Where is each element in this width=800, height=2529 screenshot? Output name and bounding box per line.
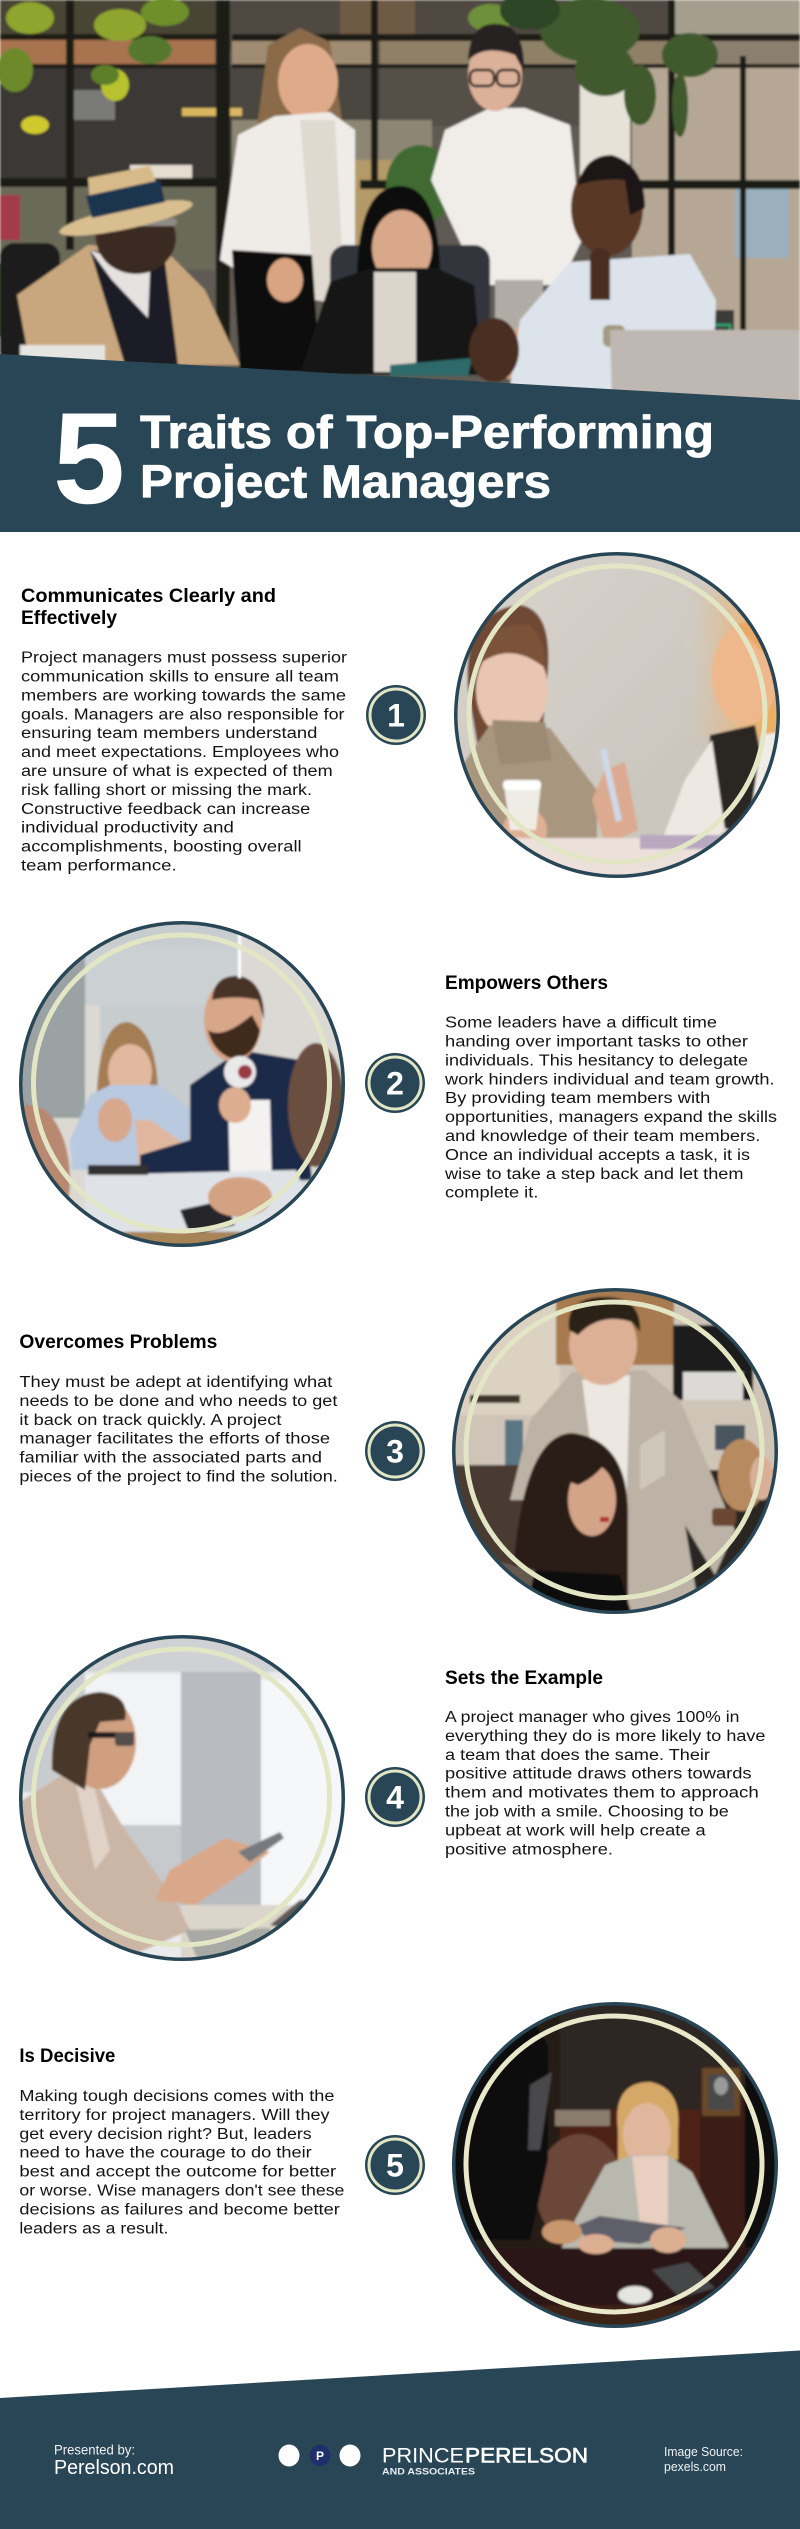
body 3: familiar with the associated parts and: [19, 1450, 322, 1467]
body 3: needs to be done and who needs to get: [19, 1393, 338, 1410]
footer: image source: Image Source:: [664, 2444, 743, 2459]
body 4: everything they do is more likely to have: [445, 1728, 765, 1745]
body 1: team performance.: [21, 858, 177, 874]
heading 1: Effectively: [21, 608, 117, 629]
footer: presented by: Perelson.com: [54, 2457, 174, 2479]
heading 5: Is Decisive: [19, 2046, 115, 2067]
body 2: wise to take a step back and let them: [444, 1166, 744, 1183]
title: Traits of Top-Performing: [140, 406, 714, 458]
photo 3: man in grey suit guiding seated woman: [450, 1285, 780, 1620]
body 1: ensuring team members understand: [21, 725, 317, 742]
body 3: pieces of the project to find the solution.: [19, 1468, 338, 1486]
hero photo: team gathered around a laptop: [0, 0, 800, 400]
trait 4 text: [445, 1668, 765, 1858]
body 3: it back on track quickly. A project: [19, 1412, 282, 1429]
body 4: the job with a smile. Choosing to be: [445, 1804, 729, 1820]
laptop: [610, 330, 800, 402]
number badge 5: 5: [386, 2148, 404, 2184]
body 2: opportunities, managers expand the skills: [445, 1109, 777, 1126]
body 2: Once an individual accepts a task, it is: [445, 1147, 750, 1164]
cream ring 2: [34, 935, 330, 1231]
body 2: [444, 1015, 777, 1202]
body 2: handing over important tasks to other: [445, 1034, 748, 1050]
body 5: [19, 2088, 344, 2237]
cream ring 4: [34, 1649, 330, 1945]
footer: image source: pexels.com: [664, 2459, 726, 2474]
title: Project Managers: [140, 456, 551, 508]
photo 2: bearded man laughing in a meeting: [0, 918, 350, 1255]
body 1: individual productivity and: [21, 820, 234, 837]
cream ring 3: [466, 1302, 762, 1598]
footer: Prince Perelson logo: PRINCE: [382, 2444, 464, 2468]
footer: presented by: [54, 2442, 174, 2479]
body 5: need to have the courage to do their: [19, 2145, 312, 2162]
body 2: By providing team members with: [445, 1090, 710, 1107]
body 1: members are working towards the same: [21, 687, 346, 704]
body 1: are unsure of what is expected of them: [21, 763, 333, 780]
number badge 2: 2: [386, 1066, 404, 1102]
body 5: decisions as failures and become better: [19, 2201, 340, 2218]
number badge 5: [365, 2135, 425, 2195]
number badge 4: 4: [386, 1780, 404, 1816]
body 4: A project manager who gives 100% in: [445, 1709, 739, 1726]
body 2: complete it.: [445, 1185, 538, 1202]
footer: presented by: Presented by:: [54, 2442, 135, 2458]
standing man: [431, 108, 582, 285]
footer: Prince Perelson logo: AND ASSOCIATES: [382, 2466, 475, 2477]
number badge 1: 1: [387, 698, 405, 734]
body 1: Constructive feedback can increase: [21, 801, 310, 818]
body 3: They must be adept at identifying what: [19, 1374, 333, 1391]
photo 5: blonde executive reading a document at a desk: [450, 2000, 780, 2335]
body 4: them and motivates them to approach: [445, 1785, 759, 1802]
body 2: and knowledge of their team members.: [445, 1128, 760, 1145]
body 2: Some leaders have a difficult time: [445, 1015, 717, 1032]
body 1: and meet expectations. Employees who: [21, 744, 339, 761]
body 3: manager facilitates the efforts of those: [19, 1431, 330, 1448]
body 1: [21, 650, 347, 874]
body 2: work hinders individual and team growth.: [444, 1071, 775, 1088]
footer: Prince Perelson logo: PERELSON: [465, 2444, 588, 2468]
body 1: goals. Managers are also responsible for: [21, 706, 344, 723]
photo 1: two women talking over coffee: [450, 550, 790, 880]
heading 2: Empowers Others: [445, 973, 608, 994]
trait 1 text: [21, 586, 347, 874]
trait 5 text: [19, 2046, 344, 2237]
cream ring 1: [469, 566, 765, 862]
body 2: individuals. This hesitancy to delegate: [445, 1052, 748, 1069]
body 5: leaders as a result.: [19, 2220, 168, 2237]
standing woman: [257, 27, 343, 124]
heading 3: Overcomes Problems: [19, 1332, 217, 1353]
footer: image source: [664, 2444, 743, 2474]
body 5: territory for project managers. Will they: [19, 2107, 330, 2124]
heading 1: Communicates Clearly and: [21, 586, 276, 607]
number badge 3: 3: [386, 1434, 404, 1470]
cream ring 5: [466, 2016, 762, 2312]
body 5: or worse. Wise managers don't see these: [19, 2182, 344, 2200]
body 1: accomplishments, boosting overall: [21, 839, 302, 856]
smiling man: [508, 254, 716, 400]
body 3: [19, 1374, 338, 1486]
number badge 1: [366, 685, 426, 745]
body 4: positive atmosphere.: [445, 1841, 613, 1858]
shelf frame: [0, 0, 800, 350]
man in hat: [0, 243, 60, 363]
footer band: [0, 2350, 800, 2529]
body 5: get every decision right? But, leaders: [19, 2126, 312, 2143]
heading 1: [21, 586, 276, 629]
footer: Prince Perelson logo: P: [316, 2449, 324, 2463]
trait 3 text: [19, 1332, 338, 1486]
body 1: risk falling short or missing the mark.: [21, 782, 312, 799]
body 1: communication skills to ensure all team: [21, 668, 339, 686]
number badge 4: [365, 1767, 425, 1827]
body 4: positive attitude draws others towards: [445, 1766, 752, 1783]
body 5: Making tough decisions comes with the: [19, 2088, 334, 2105]
number badge 2: [365, 1053, 425, 1113]
footer: Prince Perelson logo: [278, 2444, 588, 2477]
trait 2 text: [444, 973, 777, 1202]
body 4: [445, 1709, 765, 1858]
heading 4: Sets the Example: [445, 1668, 603, 1689]
title: [140, 406, 714, 508]
photo 4: man in glasses holding a phone: [15, 1632, 351, 1965]
body 4: a team that does the same. Their: [445, 1747, 710, 1764]
body 5: best and accept the outcome for better: [19, 2164, 336, 2181]
plants: [0, 0, 190, 136]
header banner: [0, 354, 800, 532]
big numeral 5: 5: [53, 385, 125, 531]
body 1: Project managers must possess superior: [21, 650, 347, 667]
number badge 3: [365, 1421, 425, 1481]
body 4: upbeat at work will help create a: [445, 1822, 706, 1839]
seated woman: [328, 244, 492, 326]
